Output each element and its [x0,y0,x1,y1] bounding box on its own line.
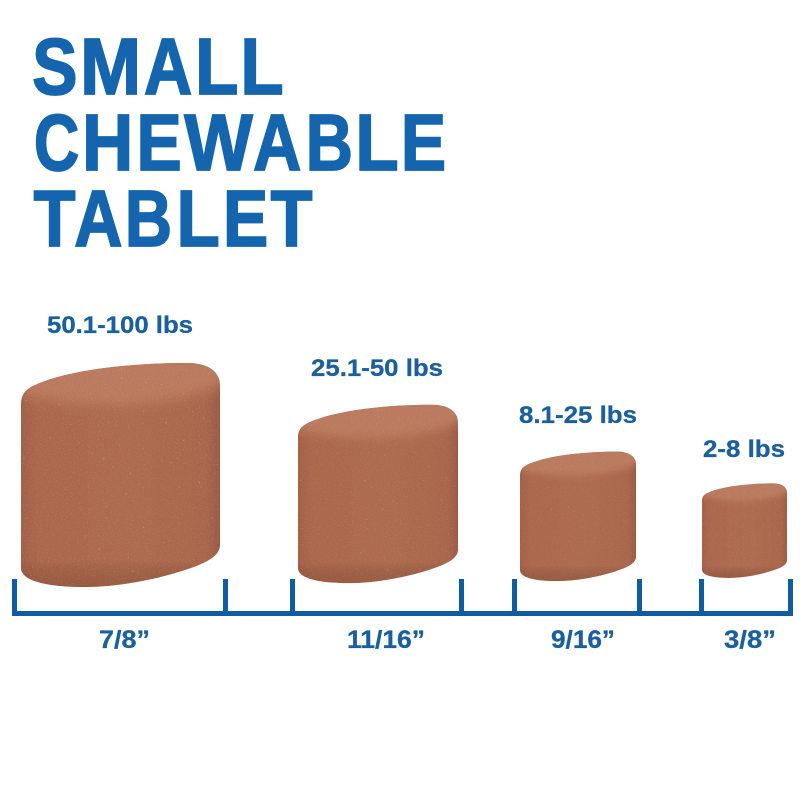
measurement ruler [12,579,793,616]
weight label: 8.1-25 lbs: 8.1-25 lbs [519,402,637,429]
title: S [32,21,78,111]
title: E [223,173,268,263]
title: L [240,21,284,111]
title: E [136,97,182,187]
title: H [82,97,133,187]
infographic canvas [12,38,793,649]
title: E [401,97,446,187]
title: A [74,173,122,263]
title: L [355,97,399,187]
tablet: 8.1-25 lbs [517,448,640,581]
title [32,21,446,263]
tablet: 25.1-50 lbs [294,400,463,583]
title: L [195,21,238,111]
title: T [34,173,75,263]
size label: 7/8 inch: 7/8” [99,626,150,654]
title: B [306,97,353,187]
title: B [125,173,172,263]
title: A [253,97,301,187]
title: T [271,173,312,263]
title: C [34,97,79,187]
weight label: 50.1-100 lbs: 50.1-100 lbs [47,312,193,339]
title: M [80,21,141,111]
weight label: 25.1-50 lbs: 25.1-50 lbs [311,355,443,382]
size label: 9/16 inch: 9/16” [551,626,615,654]
tablet: 50.1-100 lbs [16,357,226,587]
tablet: 2-8 lbs [700,481,790,578]
title: A [144,21,192,111]
weight label: 2-8 lbs: 2-8 lbs [703,436,785,463]
size label: 3/8 inch: 3/8” [724,626,776,654]
size label: 11/16 inch: 11/16” [347,626,425,654]
title: W [184,97,253,187]
title: L [177,173,220,263]
